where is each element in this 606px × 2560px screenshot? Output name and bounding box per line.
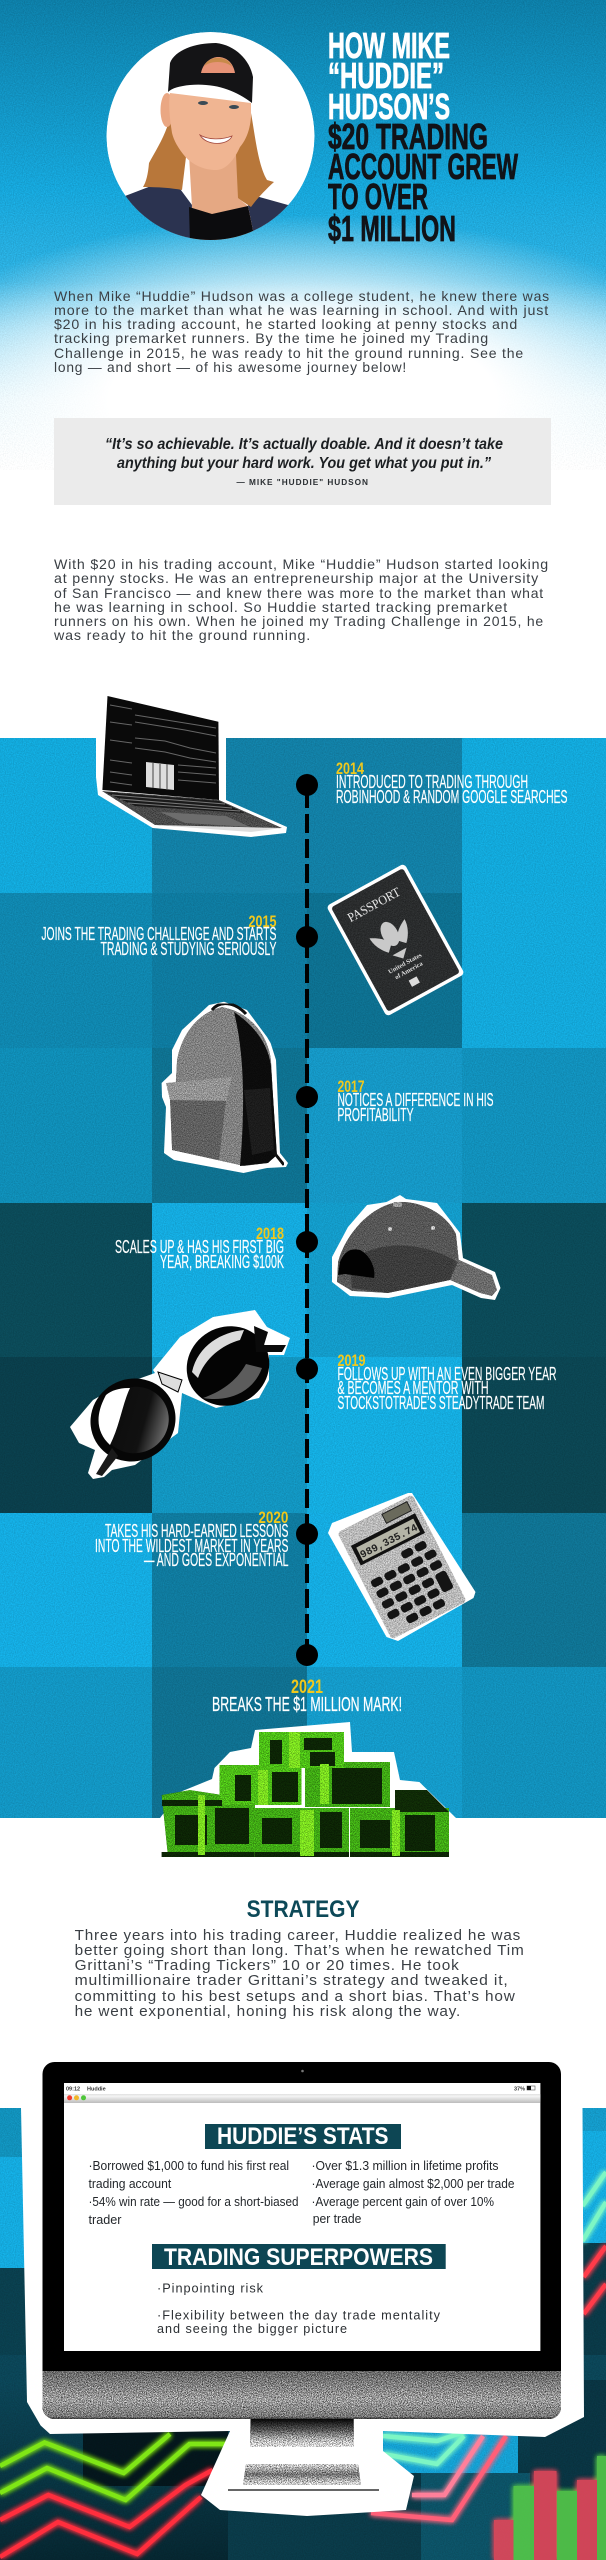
2019 milestone: 2019 — [338, 1351, 366, 1370]
2014 milestone: 2014 — [336, 759, 364, 778]
intro paragraph: tracking premarket runners. By the time he joined my Trading — [54, 330, 489, 346]
title — [328, 25, 518, 249]
stats left column: ·Borrowed $1,000 to fund his first real — [88, 2158, 289, 2173]
intro paragraph: When Mike “Huddie” Hudson was a college student, he knew there was — [54, 288, 550, 304]
quote text: “It’s so achievable. It’s actually doable. And it doesn’t take — [105, 436, 503, 453]
stats left column: trader — [88, 2212, 122, 2227]
portrait ear — [160, 93, 171, 127]
2021 milestone — [212, 1677, 402, 1716]
superpowers list: and seeing the bigger picture — [157, 2321, 348, 2336]
heading: trading superpowers: TRADING SUPERPOWERS — [164, 2244, 433, 2271]
quote box — [54, 418, 551, 505]
timeline checkerboard background — [0, 738, 606, 1818]
second paragraph: he was learning in school. So Huddie started tracking premarket — [54, 599, 508, 615]
intro paragraph: more to the market than what he was learning in school. And with just — [54, 302, 549, 318]
superpowers list: ·Pinpointing risk — [157, 2281, 264, 2296]
portrait cap — [168, 43, 253, 103]
2021 milestone: BREAKS THE $1 MILLION MARK! — [212, 1694, 402, 1716]
portrait hair — [143, 113, 274, 207]
stats left column: ·54% win rate — good for a short-biased — [88, 2194, 298, 2209]
2018 milestone — [115, 1224, 284, 1272]
portrait smile — [200, 135, 232, 143]
quote attribution: — MIKE "HUDDIE" HUDSON — [236, 477, 369, 487]
title: “HUDDIE” — [328, 55, 444, 96]
strategy paragraph: Three years into his trading career, Huddie realized he was — [75, 1927, 521, 1944]
portrait shirt — [126, 187, 288, 238]
second paragraph: With $20 in his trading account, Mike “Huddie” Hudson started looking — [54, 556, 549, 572]
2020 milestone: INTO THE WILDEST MARKET IN YEARS — [95, 1536, 288, 1556]
intro paragraph: $20 in his trading account, he started looking at penny stocks and — [54, 316, 518, 332]
monitor stand — [228, 2419, 379, 2491]
window title bar: 09:12 — [66, 2086, 80, 2092]
title: HOW MIKE — [328, 25, 450, 66]
monitor screen — [64, 2083, 540, 2351]
header gradient background — [0, 0, 606, 480]
intro paragraph: Challenge in 2015, he was ready to hit the ground running. See the — [54, 345, 524, 361]
passport wording: PASSPORT — [345, 884, 403, 925]
strategy paragraph: he went exponential, honing his risk along the way. — [75, 2003, 461, 2020]
portrait face — [169, 93, 251, 170]
2020 milestone: — AND GOES EXPONENTIAL — [144, 1550, 288, 1570]
icon: laptop — [96, 690, 287, 837]
superpowers list — [157, 2281, 441, 2336]
window title bar: 37% — [514, 2086, 525, 2092]
icon: stacks of money — [160, 1722, 456, 1857]
2014 milestone — [336, 759, 568, 807]
stats right column: per trade — [313, 2211, 361, 2226]
icon: calculator — [328, 1493, 476, 1641]
2017 milestone: NOTICES A DIFFERENCE IN HIS — [338, 1090, 494, 1110]
2015 milestone: JOINS THE TRADING CHALLENGE AND STARTS — [41, 924, 276, 944]
2019 milestone — [338, 1351, 556, 1413]
stats right column: ·Over $1.3 million in lifetime profits — [312, 2158, 499, 2173]
strategy paragraph: committing to his best setups and a short bias. That’s how — [75, 1988, 516, 2005]
heading: strategy: STRATEGY — [247, 1896, 360, 1923]
superpowers list: ·Flexibility between the day trade mentality — [157, 2307, 441, 2322]
portrait: Mike Huddie Hudson — [106, 32, 314, 245]
bottom market chart background — [0, 2108, 606, 2560]
quote text — [105, 436, 503, 472]
heading: Huddie's stats: HUDDIE’S STATS — [217, 2123, 388, 2150]
second paragraph — [53, 556, 549, 643]
candlestick bars — [494, 2456, 606, 2560]
strategy paragraph: Grittani’s “Trading Tickers” 10 or 20 times. He took — [75, 1957, 460, 1974]
2015 milestone: 2015 — [248, 912, 276, 931]
second paragraph: was ready to hit the ground running. — [53, 627, 311, 643]
monitor — [21, 2050, 584, 2516]
second paragraph: runners on his own. When he joined my Trading Challenge in 2015, he — [54, 613, 544, 629]
2018 milestone: SCALES UP & HAS HIS FIRST BIG — [115, 1237, 284, 1257]
2020 milestone: 2020 — [258, 1508, 288, 1527]
stats right column: ·Average gain almost $2,000 per trade — [312, 2176, 514, 2191]
2015 milestone — [41, 912, 277, 959]
icon: baseball cap — [332, 1195, 500, 1300]
passport country text: United States — [387, 952, 423, 976]
passport country text — [387, 952, 427, 983]
2017 milestone — [338, 1077, 494, 1125]
stats left column — [88, 2158, 298, 2227]
title: $1 MILLION — [328, 208, 456, 249]
2018 milestone: YEAR, BREAKING $100K — [160, 1252, 284, 1272]
2020 milestone: TAKES HIS HARD-EARNED LESSONS — [105, 1521, 288, 1541]
stats right column: ·Average percent gain of over 10% — [312, 2194, 494, 2209]
icon: passport — [326, 863, 465, 1017]
second paragraph: at penny stocks. He was an entrepreneurship major at the University — [54, 570, 539, 586]
2017 milestone: PROFITABILITY — [338, 1105, 414, 1125]
monitor body — [42, 2062, 561, 2419]
calculator display: 989,335.74 — [358, 1522, 420, 1562]
2019 milestone: & BECOMES A MENTOR WITH — [338, 1378, 488, 1398]
2017 milestone: 2017 — [338, 1077, 364, 1096]
stats left column: trading account — [88, 2176, 172, 2191]
portrait neck and tee — [189, 155, 256, 245]
passport eagle — [366, 913, 421, 968]
strategy paragraph — [75, 1927, 525, 2020]
2018 milestone: 2018 — [256, 1224, 284, 1243]
intro paragraph — [54, 288, 550, 375]
quote text: anything but your hard work. You get what you put in.” — [117, 455, 491, 472]
passport country text: of America — [394, 960, 425, 981]
2021 milestone: 2021 — [291, 1677, 323, 1698]
intro paragraph: long — and short — of his awesome journey below! — [54, 359, 407, 375]
icon: backpack — [162, 1002, 288, 1173]
second paragraph: of San Francisco — and knew there was more to the market than what — [54, 585, 544, 601]
title: $20 TRADING — [328, 116, 488, 157]
strategy paragraph: better going short than long. That’s when he rewatched Tim — [75, 1942, 525, 1959]
2020 milestone — [95, 1508, 288, 1570]
title: HUDSON’S — [328, 86, 450, 127]
monitor chin — [42, 2371, 561, 2419]
strategy paragraph: multimillionaire trader Grittani’s strategy and tweaked it, — [75, 1972, 509, 1989]
2015 milestone: TRADING & STUDYING SERIOUSLY — [100, 939, 276, 959]
window title bar — [64, 2086, 540, 2103]
green and red trend lines — [0, 2172, 606, 2557]
stats right column — [312, 2158, 514, 2226]
timeline line with dots — [296, 774, 318, 1666]
window title bar: Huddie — [87, 2086, 106, 2092]
monitor white cutout — [21, 2050, 584, 2516]
portrait eyes — [198, 101, 239, 109]
title: TO OVER — [328, 176, 428, 217]
icon: sunglasses — [70, 1310, 290, 1479]
